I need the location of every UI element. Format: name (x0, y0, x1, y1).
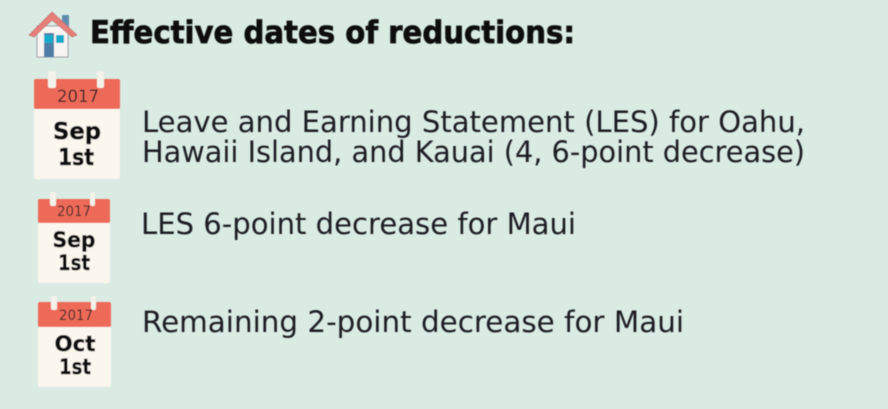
calendar: Sep 1st 2017 (second): 2017 (57, 204, 91, 220)
calendar: Sep 1st 2017 (first) (34, 71, 120, 179)
calendar: Oct 1st 2017: 2017 (59, 308, 93, 324)
calendar: Oct 1st 2017 (38, 296, 111, 387)
calendar: Oct 1st 2017: Oct (54, 332, 96, 356)
calendar: Sep 1st 2017 (second) (38, 192, 110, 283)
calendar: Sep 1st 2017 (first): 2017 (57, 87, 99, 107)
title: Effective dates of reductions: (90, 15, 575, 51)
text: Oahu, Hawaii Island and Kauai reductions (142, 105, 805, 169)
text: remaining Maui decrease: Remaining 2-point decrease for Maui (142, 305, 684, 339)
text: Maui 6-point decrease: LES 6-point decrease for Maui (141, 207, 576, 241)
calendar: Sep 1st 2017 (first): 1st (58, 145, 94, 171)
text: Oahu, Hawaii Island and Kauai reductions: Hawaii Island, and Kauai (4, 6-point decrease) (142, 135, 805, 169)
calendar: Sep 1st 2017 (first): Sep (53, 119, 101, 145)
text: Oahu, Hawaii Island and Kauai reductions: Leave and Earning Statement (LES) for Oahu, (142, 105, 805, 139)
calendar: Sep 1st 2017 (second): 1st (58, 251, 90, 275)
calendar: Oct 1st 2017: 1st (59, 355, 91, 379)
icon: house (29, 12, 77, 57)
calendar: Sep 1st 2017 (second): Sep (52, 228, 96, 252)
